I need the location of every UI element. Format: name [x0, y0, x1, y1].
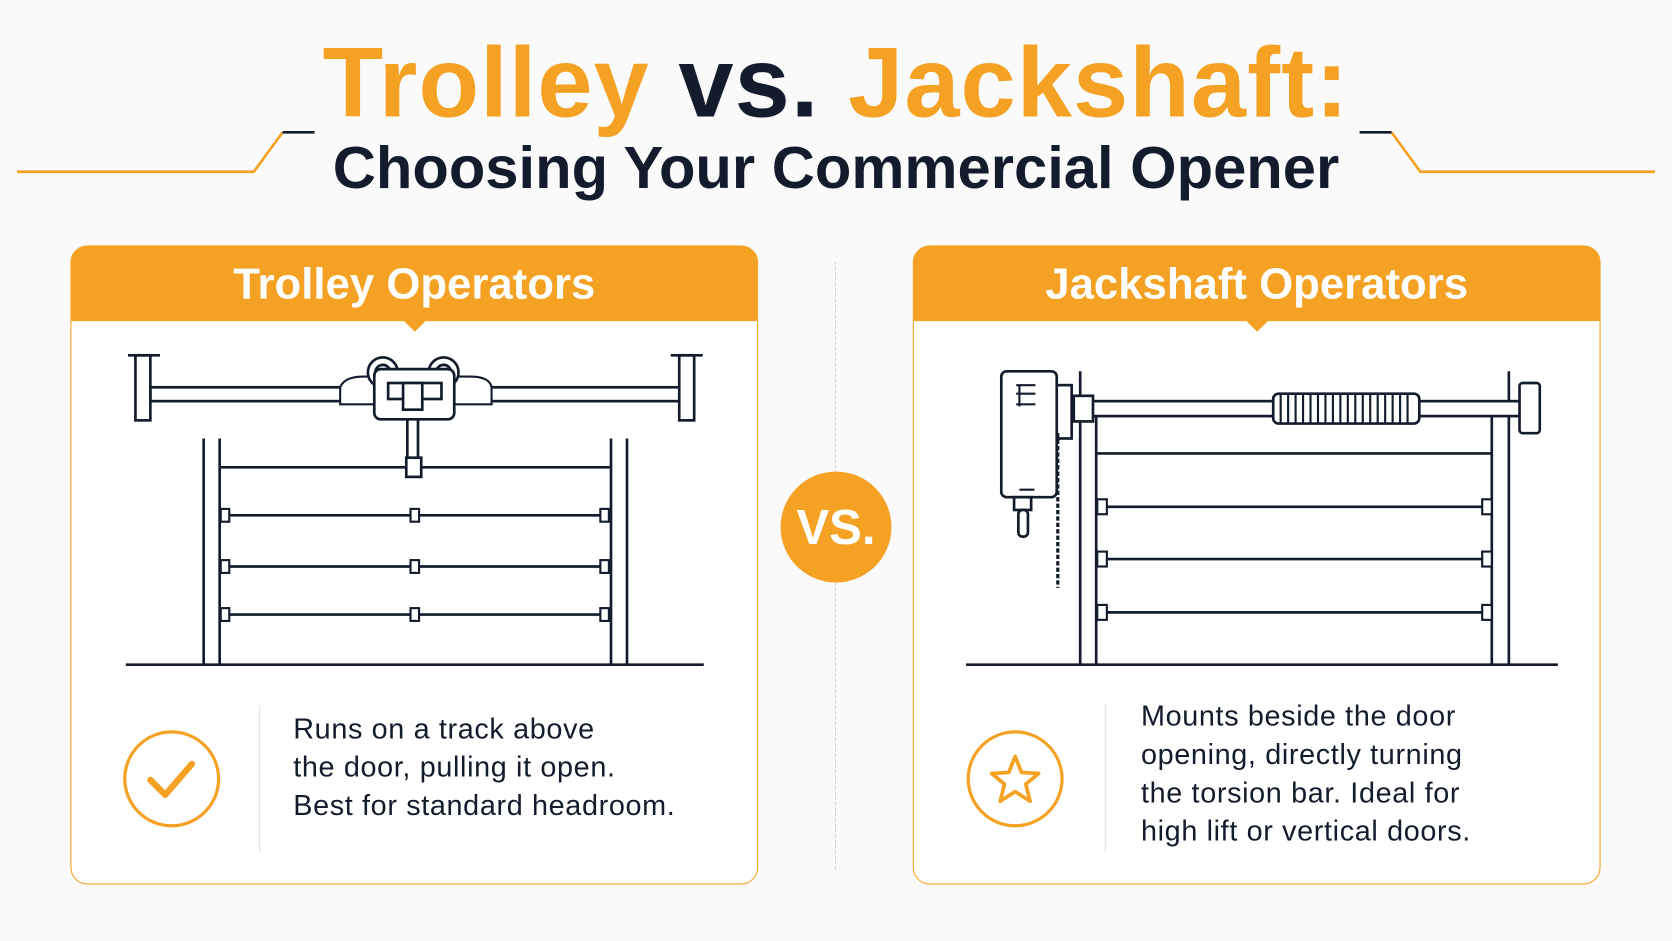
divider — [1105, 703, 1106, 851]
text: jackshaft description: high lift or vertical doors. — [1141, 815, 1471, 847]
title — [323, 27, 1349, 201]
divider — [259, 705, 260, 851]
text: trolley description: the door, pulling it open. — [293, 751, 616, 783]
icon: checkmark circle — [123, 730, 220, 828]
center dashed divider — [835, 261, 836, 870]
panel: trolley operators — [70, 245, 758, 884]
heading: trolley operators — [71, 246, 757, 321]
text: trolley description — [293, 713, 675, 822]
heading: jackshaft operators: Jackshaft Operators — [1045, 259, 1468, 308]
text: jackshaft description: Mounts beside the door — [1141, 700, 1456, 732]
heading: trolley operators: Trolley Operators — [233, 259, 595, 308]
icon: star circle — [966, 730, 1064, 828]
heading: jackshaft operators — [914, 246, 1599, 321]
vs badge — [781, 472, 891, 583]
text: jackshaft description — [1141, 700, 1471, 847]
panel: jackshaft operators — [913, 245, 1601, 884]
text: trolley description: Best for standard headroom. — [293, 789, 675, 822]
title line 1: Trolley vs. Jackshaft: — [323, 27, 1349, 138]
text: jackshaft description: the torsion bar. Ideal for — [1141, 777, 1460, 809]
diagram: jackshaft opener — [966, 370, 1558, 666]
text: trolley description: Runs on a track above — [293, 713, 595, 745]
diagram: trolley opener — [126, 354, 704, 666]
subtitle: Choosing Your Commercial Opener — [333, 133, 1339, 201]
vs badge: VS. — [796, 499, 876, 555]
decorative title lines — [17, 131, 1655, 174]
text: jackshaft description: opening, directly turning — [1141, 738, 1463, 770]
